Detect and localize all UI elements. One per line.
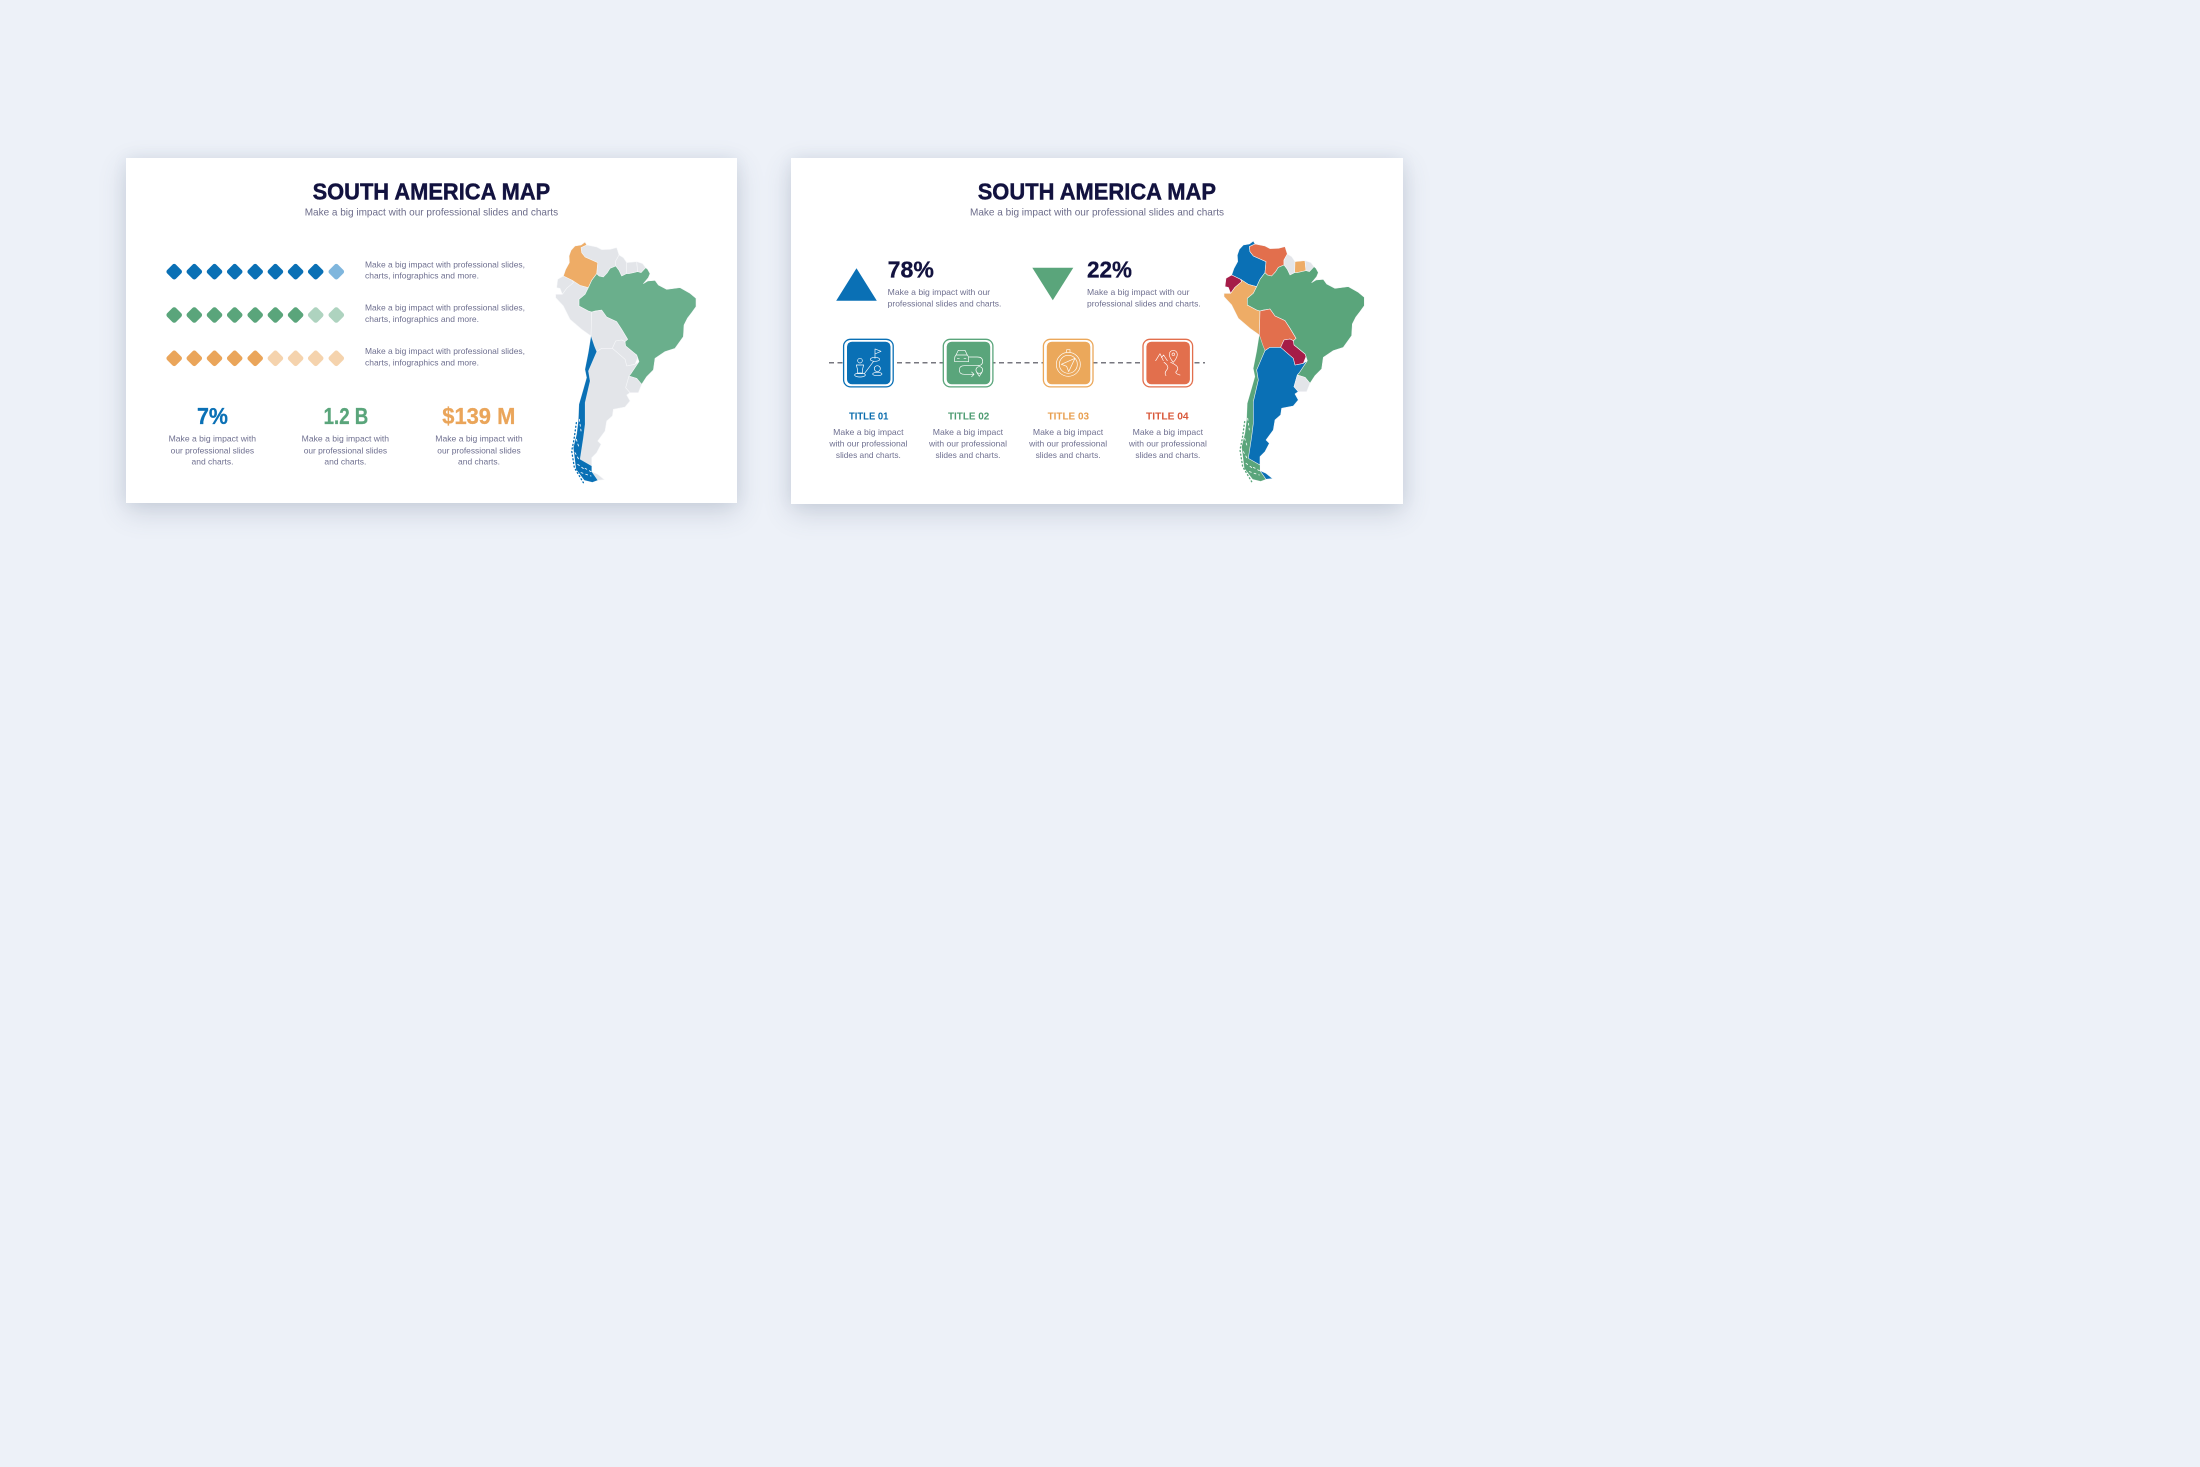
title: SOUTH AMERICA MAP — [978, 178, 1216, 204]
stat: 78%: 78% — [888, 256, 934, 282]
stat: 1.2 B: Make a big impact with — [302, 434, 389, 444]
label: title 03: with our professional — [1028, 438, 1107, 448]
white speckles on the southern Chile coast — [575, 419, 591, 476]
icon tile: red, mountain and map pin — [1143, 339, 1193, 387]
stat: 1.2 B: our professional slides — [304, 445, 387, 455]
map: South America, Colombia Brazil Chile highlighted — [556, 242, 696, 483]
label: title 04: with our professional — [1128, 438, 1207, 448]
label: title 04: Make a big impact — [1133, 427, 1204, 437]
stat: 7%: and charts. — [192, 457, 234, 467]
label: title 01: Make a big impact — [833, 427, 904, 437]
stat: 78%: professional slides and charts. — [888, 298, 1001, 308]
text: green row description: charts, infographics and more. — [365, 314, 479, 324]
text: orange row description — [365, 346, 525, 367]
panel: right slide, percentages, timeline and coloured map — [791, 158, 1403, 504]
label: title 03 — [1028, 410, 1107, 460]
text: blue row description — [365, 259, 525, 281]
diamond row: green 7 of 9 — [165, 306, 345, 324]
stat: 78% — [888, 256, 1001, 308]
subtitle: Make a big impact with our professional slides and charts — [305, 208, 558, 219]
label: title 01: slides and charts. — [836, 450, 901, 460]
text: blue row description: Make a big impact with professional slides, — [365, 259, 525, 269]
islets off the southern Chile coast — [572, 423, 583, 483]
stat: $139 M — [435, 403, 523, 467]
stat: 7%: 7% — [197, 403, 228, 429]
stat: 1.2 B: 1.2 B — [324, 403, 368, 429]
icon tile: green, car and route — [943, 339, 993, 387]
label: title 02: Make a big impact — [933, 427, 1004, 437]
label: title 04: TITLE 04 — [1146, 410, 1189, 422]
text: orange row description: Make a big impact with professional slides, — [365, 346, 525, 356]
label: title 02: slides and charts. — [936, 450, 1000, 460]
label: title 02: TITLE 02 — [948, 410, 989, 422]
text: orange row description: charts, infographics and more. — [365, 357, 479, 367]
stat: $139 M: Make a big impact with — [435, 434, 523, 444]
panel: left slide, diamond ratings and stats — [126, 158, 737, 503]
stat: 22%: professional slides and charts. — [1087, 298, 1201, 308]
stat: 7%: Make a big impact with — [169, 434, 256, 444]
label: title 02: with our professional — [928, 438, 1007, 448]
stat: 22%: 22% — [1087, 256, 1132, 282]
islets off the southern Chile coast — [1240, 422, 1252, 482]
stat: $139 M: our professional slides — [437, 445, 521, 455]
map: South America, all countries coloured — [1224, 241, 1364, 482]
label: title 01: with our professional — [828, 438, 908, 448]
white speckles on the southern Chile coast — [1243, 418, 1259, 475]
subtitle: Make a big impact with our professional slides and charts — [970, 208, 1224, 219]
label: title 03: Make a big impact — [1033, 427, 1104, 437]
stat: 22% — [1087, 256, 1201, 308]
icon tile: blue, flag and person — [844, 339, 893, 387]
stat: 1.2 B: and charts. — [324, 457, 366, 467]
icon: green down triangle — [1032, 268, 1073, 300]
diamond row: orange 5 of 9 — [165, 350, 345, 367]
label: title 03: slides and charts. — [1036, 450, 1101, 460]
stat: 22%: Make a big impact with our — [1087, 287, 1190, 297]
icon tile: orange, compass — [1043, 339, 1093, 387]
title: SOUTH AMERICA MAP — [313, 178, 550, 204]
stat: $139 M: and charts. — [458, 457, 500, 467]
stat: 7%: our professional slides — [171, 445, 254, 455]
label: title 04 — [1128, 410, 1207, 460]
icon: blue up triangle — [836, 268, 877, 301]
label: title 04: slides and charts. — [1135, 450, 1200, 460]
label: title 02 — [928, 410, 1007, 460]
label: title 01: TITLE 01 — [849, 410, 889, 422]
label: title 01 — [828, 410, 908, 460]
text: blue row description: charts, infographics and more. — [365, 271, 479, 281]
text: green row description — [365, 303, 525, 324]
text: green row description: Make a big impact with professional slides, — [365, 303, 525, 313]
stat: $139 M: $139 M — [442, 403, 515, 429]
diamond row: blue 8 of 9 — [165, 263, 345, 280]
stat: 1.2 B — [302, 403, 389, 467]
label: title 03: TITLE 03 — [1048, 410, 1089, 422]
stat: 78%: Make a big impact with our — [888, 287, 990, 297]
stat: 7% — [169, 403, 256, 467]
